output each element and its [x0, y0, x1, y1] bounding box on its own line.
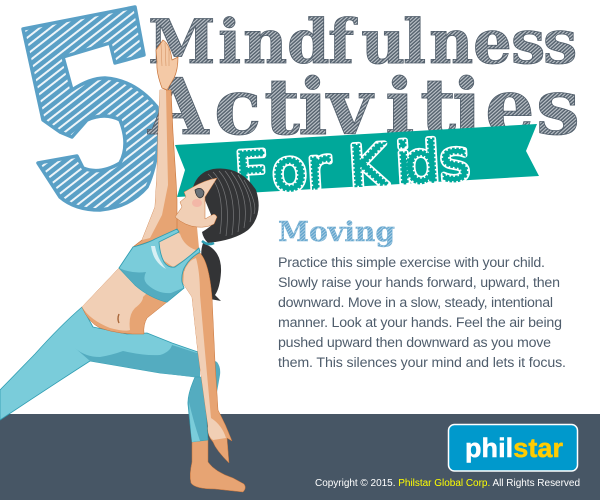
philstar logo: philstar	[465, 433, 563, 463]
ponytail	[201, 243, 221, 301]
title line: Activities: Activities	[147, 62, 580, 153]
chest highlight	[157, 232, 196, 267]
heading: Moving: Moving	[278, 217, 395, 248]
face	[175, 178, 217, 227]
ribbon text: For Kids outline: For Kids	[233, 128, 471, 207]
hair tie	[202, 241, 214, 244]
illustration: girl in yoga pose	[0, 40, 259, 492]
leggings	[0, 307, 220, 442]
hair	[193, 168, 259, 243]
ribbon text: For Kids outline: For Kids	[233, 128, 471, 207]
body text block: downward. Move in a slow, steady, intentional	[278, 295, 553, 311]
philstar logo	[448, 424, 578, 471]
body text block: Slowly raise your hands forward, upward, then	[278, 275, 560, 291]
navel	[118, 314, 119, 323]
torso highlight	[82, 268, 147, 331]
copyright line: Copyright © 2015. Philstar Global Corp. All Rights Reserved	[315, 478, 580, 489]
sports bra	[119, 229, 200, 302]
big number 5	[23, 7, 159, 210]
cheek	[192, 199, 202, 207]
body text block: manner. Look at your hands. Feel the air being	[278, 315, 562, 331]
body text block: Practice this simple exercise with your child.	[278, 255, 545, 271]
chest	[119, 218, 199, 288]
body text block: them. This silences your mind and lets it focus.	[278, 355, 566, 371]
raised arm	[133, 90, 177, 247]
torso	[82, 268, 167, 334]
title line: Mindfulness: Mindfulness	[148, 7, 577, 78]
body text block: pushed upward then downward as you move	[278, 335, 551, 351]
footer band	[0, 414, 600, 500]
lowered arm and hand	[182, 253, 232, 463]
hair strands	[208, 171, 255, 236]
back foot	[190, 438, 245, 492]
teal ribbon with For Kids	[175, 124, 539, 207]
body text block	[278, 255, 566, 371]
hand	[156, 40, 178, 90]
eye	[195, 188, 204, 198]
